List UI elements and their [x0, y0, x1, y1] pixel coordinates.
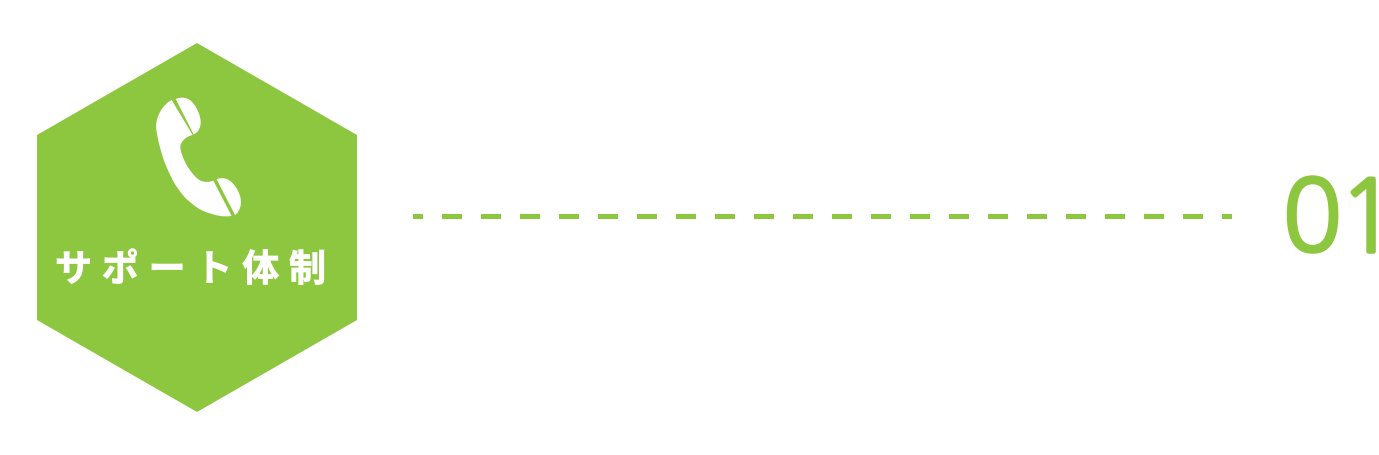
dashed connector line — [413, 214, 1232, 219]
hexagon badge — [37, 43, 357, 412]
badge label: サポート体制 — [55, 238, 336, 292]
icon: telephone handset — [156, 98, 241, 216]
